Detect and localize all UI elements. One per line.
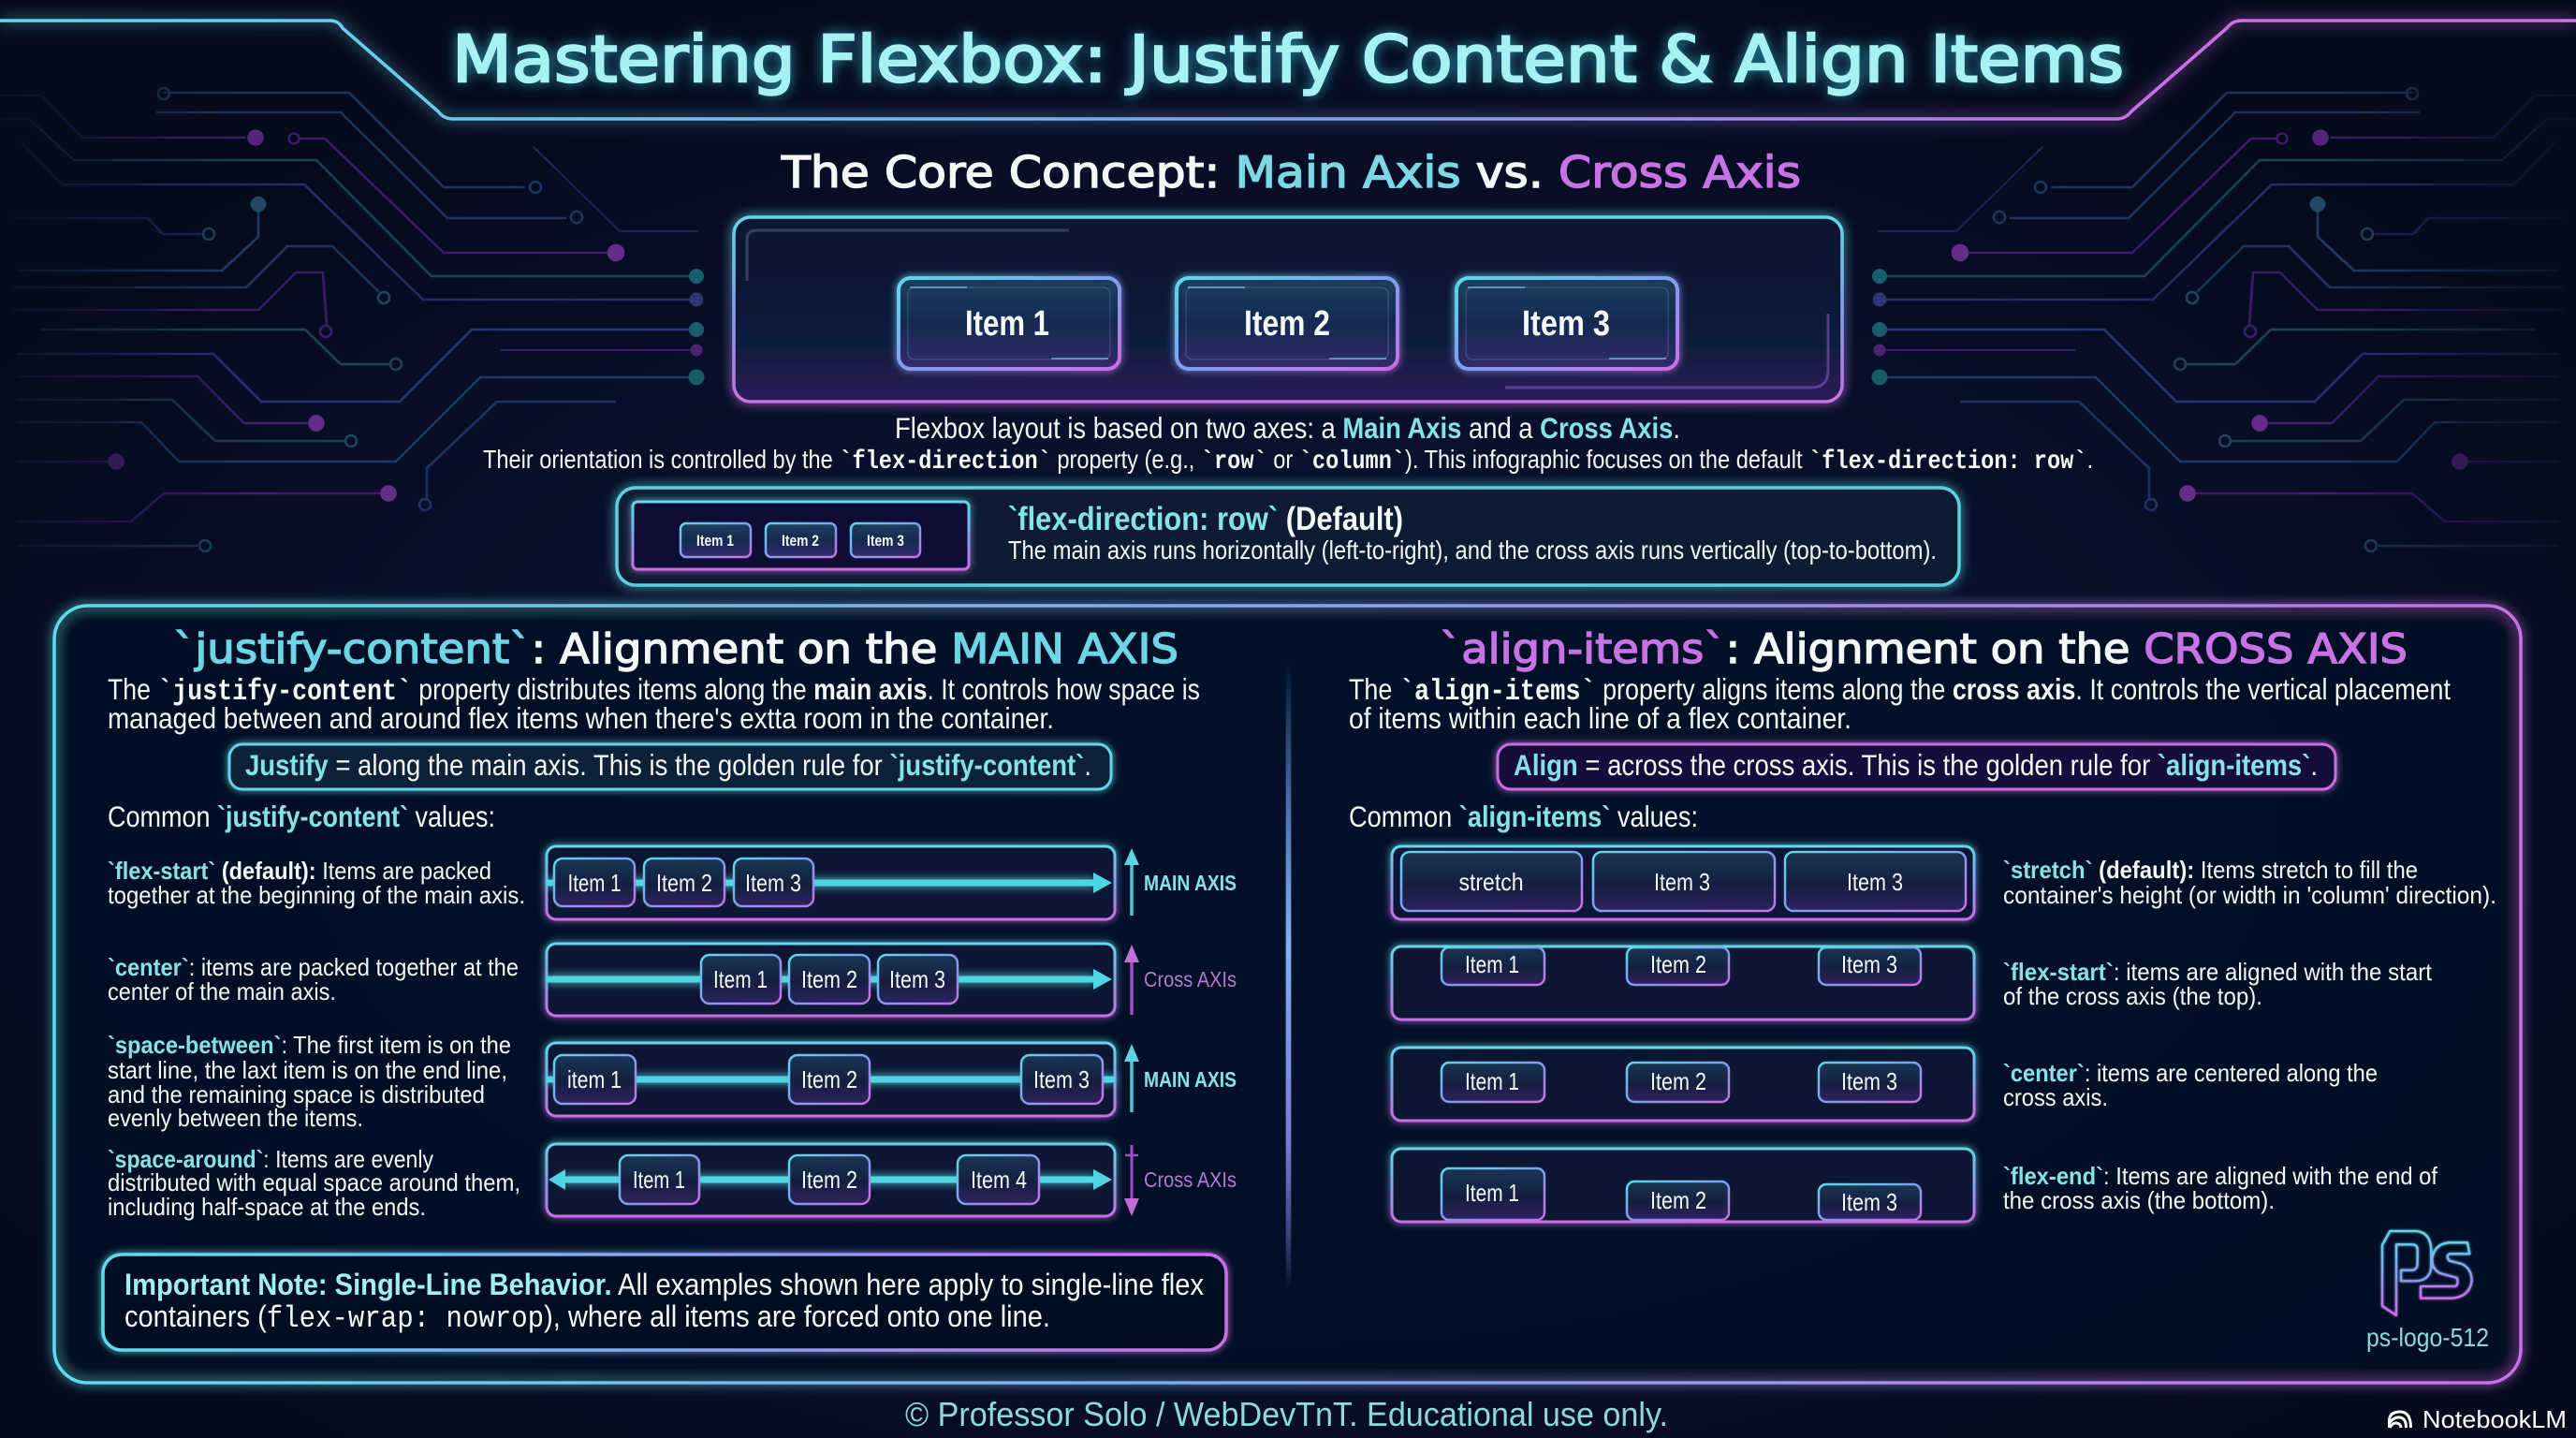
icon: ps logo <box>2382 1231 2472 1315</box>
footer credit: © Professor Solo / WebDevTnT. Educational use only. <box>905 1395 1668 1433</box>
row: space-around diagram <box>547 1144 1115 1216</box>
item 2: Item 2 <box>1244 304 1330 344</box>
align-items description <box>1349 672 2451 735</box>
row: flex-end diagram <box>1392 1149 1974 1222</box>
axis label: cross 2: Cross AXIs <box>1144 1167 1237 1192</box>
row: space-around description: distributed with equal space around them, <box>108 1168 520 1196</box>
row: space-between description <box>108 1031 511 1132</box>
common values label: Common `justify-content` values: <box>108 800 495 833</box>
row: stretch diagram: Item 3 <box>1654 868 1710 896</box>
row: center diagram: Item 1 <box>1465 1067 1519 1095</box>
axis label: main <box>1124 848 1237 916</box>
common values label: Common `align-items` values: <box>1349 800 1698 833</box>
circuit traces: right <box>1872 88 2576 551</box>
row: stretch description: container's height (or width in 'column' direction). <box>2003 881 2496 909</box>
item 1: Item 1 <box>965 304 1049 344</box>
row: space-around diagram: Item 2 <box>801 1166 857 1194</box>
row: flex-end description: `flex-end`: Items are aligned with the end of <box>2003 1162 2438 1190</box>
panel: justify-content <box>103 625 1237 1350</box>
main comparison panel <box>54 606 2521 1383</box>
heading: justify-content: `justify-content` : Alignment on the MAIN AXIS <box>173 625 1178 673</box>
row: flex-start diagram: Item 3 <box>745 869 801 897</box>
row: flex-start diagram: Item 2 <box>656 869 712 897</box>
row: flex-start diagram <box>1392 946 1974 1020</box>
row: flex-end diagram: Item 3 <box>1841 1188 1897 1216</box>
row: space-around description: `space-around`: Items are evenly <box>108 1145 433 1173</box>
row: center description <box>2003 1059 2378 1111</box>
axis label: main: MAIN AXIS <box>1144 871 1237 895</box>
important note: Important Note: Single-Line Behavior. All examples shown here apply to single-line flex <box>124 1268 1204 1301</box>
row: space-between diagram: Item 3 <box>1033 1065 1090 1093</box>
important note: containers (flex-wrap: nowrop), where all items are forced onto one line. <box>124 1299 1050 1336</box>
centre divider <box>1286 661 1291 1292</box>
row: center diagram <box>547 944 1115 1016</box>
row: space-between description: `space-between`: The first item is on the <box>108 1031 511 1059</box>
row: stretch description: `stretch` (default): Items stretch to fill the <box>2003 856 2418 884</box>
row: space-between description: evenly between the items. <box>108 1104 363 1132</box>
row: space-around description: including half-space at the ends. <box>108 1193 426 1221</box>
core flex container diagram <box>734 217 1842 402</box>
row: flex-start description: of the cross axis (the top). <box>2003 982 2262 1010</box>
row: flex-start description: together at the beginning of the main axis. <box>108 881 525 909</box>
row: center diagram: Item 2 <box>801 965 857 993</box>
callout text <box>1008 501 1937 565</box>
row: flex-end diagram: Item 1 <box>1465 1179 1519 1207</box>
core concept heading: The Core Concept: Main Axis vs. Cross Axis <box>781 147 1801 198</box>
row: space-between description: and the remaining space is distributed <box>108 1080 485 1108</box>
header frame line <box>0 21 2576 119</box>
row: flex-end description: the cross axis (the bottom). <box>2003 1186 2275 1214</box>
row: center description: cross axis. <box>2003 1083 2108 1111</box>
row: space-around diagram: Item 1 <box>633 1166 685 1194</box>
callout text: The main axis runs horizontally (left-to-right), and the cross axis runs vertically (top-to-bottom). <box>1008 536 1937 565</box>
row: flex-start diagram: Item 1 <box>1465 950 1519 978</box>
mini flex diagram <box>633 502 969 569</box>
axis label: main 2: MAIN AXIS <box>1144 1067 1237 1092</box>
row: flex-start description <box>108 857 525 909</box>
row: center description: center of the main axis. <box>108 977 336 1005</box>
align-items description: The `align-items` property aligns items along the cross axis. It controls the vertical placement <box>1349 672 2451 709</box>
row: flex-start description <box>2003 958 2433 1010</box>
important note <box>103 1255 1226 1350</box>
axis label: main 2 <box>1124 1044 1237 1112</box>
item 3: Item 3 <box>1522 304 1610 344</box>
mini flex diagram: Item 3 <box>867 532 904 550</box>
align-items description: of items within each line of a flex container. <box>1349 701 1852 735</box>
row: center description <box>108 953 519 1005</box>
row: center description: `center`: items are packed together at the <box>108 953 519 981</box>
row: flex-start diagram: Item 1 <box>567 869 622 897</box>
axis label: cross 2 <box>1124 1145 1237 1216</box>
item 2 <box>1177 278 1398 369</box>
axes intro text: Flexbox layout is based on two axes: a Main Axis and a Cross Axis. <box>895 411 1680 445</box>
row: center diagram: Item 1 <box>713 965 768 993</box>
justify-content description: managed between and around flex items when there's extta room in the container. <box>108 701 1054 735</box>
axis label: cross <box>1124 945 1237 1015</box>
row: flex-start description: `flex-start` (default): Items are packed <box>108 857 491 885</box>
row: space-between diagram <box>547 1043 1115 1116</box>
golden rule: align: Align = across the cross axis. This is the golden rule for `align-items`. <box>1514 748 2318 782</box>
row: stretch diagram: stretch <box>1458 868 1524 896</box>
heading: align-items: `align-items` : Alignment on the CROSS AXIS <box>1440 625 2408 673</box>
row: space-around description <box>108 1145 520 1221</box>
row: center diagram: Item 3 <box>889 965 945 993</box>
circuit traces: left <box>0 88 704 551</box>
item 1 <box>899 278 1120 369</box>
logo caption: ps-logo-512 <box>2366 1323 2489 1352</box>
axes intro text: Their orientation is controlled by the `flex-direction` property (e.g., `row` or `column`). This infographic focuses on the default `flex-direction: row`. <box>483 445 2093 477</box>
row: space-around diagram: Item 4 <box>971 1166 1027 1194</box>
row: space-between diagram: Item 2 <box>801 1065 857 1093</box>
axis label: cross: Cross AXIs <box>1144 967 1237 991</box>
row: flex-end description <box>2003 1162 2438 1214</box>
flex-direction row callout <box>617 488 1959 585</box>
mini flex diagram: Item 2 <box>782 532 819 550</box>
callout text: `flex-direction: row` (Default) <box>1008 501 1403 537</box>
golden rule: justify: Justify = along the main axis. This is the golden rule for `justify-content`. <box>245 748 1091 782</box>
axes intro text <box>483 411 2093 477</box>
row: center diagram: Item 2 <box>1650 1067 1706 1095</box>
item 3 <box>1456 278 1677 369</box>
row: center diagram: Item 3 <box>1841 1067 1897 1095</box>
row: space-between description: start line, the laxt item is on the end line, <box>108 1056 507 1084</box>
row: center diagram <box>1392 1048 1974 1121</box>
row: center description: `center`: items are centered along the <box>2003 1059 2378 1087</box>
row: flex-start diagram: Item 3 <box>1841 950 1897 978</box>
icon: notebooklm <box>2389 1412 2411 1428</box>
row: stretch description <box>2003 856 2496 909</box>
row: space-between diagram: item 1 <box>567 1065 622 1093</box>
justify-content description: The `justify-content` property distributes items along the main axis. It controls how space is <box>108 672 1200 709</box>
row: flex-start diagram <box>547 846 1115 919</box>
row: stretch diagram: Item 3 <box>1847 868 1903 896</box>
row: stretch diagram <box>1392 846 1974 919</box>
row: flex-start description: `flex-start`: items are aligned with the start <box>2003 958 2433 986</box>
row: flex-end diagram: Item 2 <box>1650 1186 1706 1214</box>
justify-content description <box>108 672 1200 735</box>
panel: align-items <box>1349 625 2496 1352</box>
title: Mastering Flexbox: Justify Content & Align Items <box>452 22 2124 97</box>
notebooklm badge: NotebookLM <box>2422 1405 2567 1433</box>
row: flex-start diagram: Item 2 <box>1650 950 1706 978</box>
mini flex diagram: Item 1 <box>696 532 734 550</box>
